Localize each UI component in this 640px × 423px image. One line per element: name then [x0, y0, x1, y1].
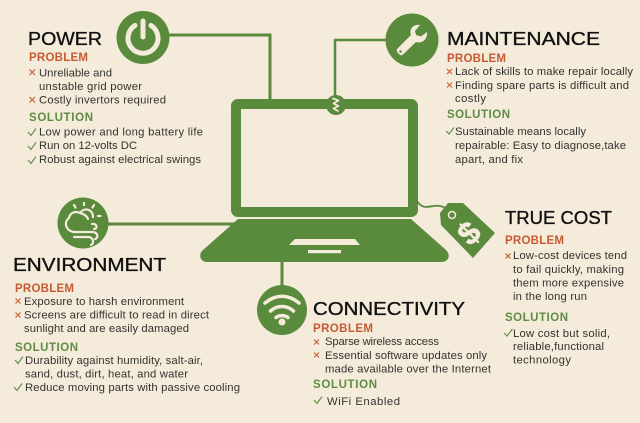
- icon: power: [116, 11, 170, 64]
- panel: true cost: [504, 207, 627, 366]
- panel: true cost: reliable,functional: [513, 341, 604, 353]
- clasp: [326, 95, 346, 115]
- panel: true cost: Low cost but solid,: [513, 328, 610, 340]
- panel: connectivity: WiFi Enabled: [327, 396, 400, 408]
- panel: true cost: PROBLEM: [505, 235, 564, 247]
- panel: power: Unreliable and: [39, 68, 112, 80]
- panel: maintenance: Sustainable means locally: [455, 126, 586, 138]
- panel: environment: Screens are difficult to read in direct: [24, 310, 210, 322]
- panel: power: Robust against electrical swings: [39, 154, 201, 166]
- laptop base: [200, 219, 449, 262]
- icon: environment: [58, 198, 108, 248]
- panel: power: [28, 28, 203, 166]
- heading: maintenance: MAINTENANCE: [447, 28, 600, 49]
- panel: true cost: SOLUTION: [505, 312, 568, 324]
- panel: connectivity: [313, 298, 492, 408]
- panel: power: Costly invertors required: [39, 94, 166, 106]
- panel: environment: Durability against humidity, salt-air,: [25, 355, 203, 367]
- panel: environment: sunlight and are easily damaged: [24, 323, 189, 335]
- connector lines: [105, 35, 451, 290]
- panel: maintenance: SOLUTION: [447, 109, 510, 121]
- panel: maintenance: Lack of skills to make repair locally: [455, 66, 633, 78]
- panel: connectivity: Essential software updates only: [325, 350, 487, 362]
- icon: price tag: $: [450, 214, 488, 252]
- panel: maintenance: PROBLEM: [447, 53, 506, 65]
- panel: connectivity: made available over the Internet: [325, 364, 492, 376]
- laptop screen: [231, 99, 418, 217]
- laptop: [200, 95, 449, 262]
- panel: maintenance: repairable: Easy to diagnose,take: [455, 140, 626, 152]
- panel: true cost: Low-cost devices tend: [513, 250, 627, 262]
- panel: connectivity: Sparse wireless access: [325, 336, 439, 348]
- panel: true cost: to fail quickly, making: [513, 264, 624, 276]
- panel: environment: Reduce moving parts with passive cooling: [25, 382, 240, 394]
- panel: environment: SOLUTION: [15, 342, 78, 354]
- panel: environment: [13, 254, 240, 394]
- heading: true cost: TRUE COST: [505, 207, 612, 228]
- panel: true cost: in the long run: [513, 291, 587, 303]
- panel: maintenance: apart, and fix: [455, 154, 523, 166]
- panel: environment: Exposure to harsh environment: [24, 296, 185, 308]
- panel: power: Low power and long battery life: [39, 126, 203, 138]
- panel: connectivity: SOLUTION: [313, 379, 377, 391]
- panel: power: SOLUTION: [29, 112, 93, 124]
- trackpad: [289, 239, 360, 245]
- panel: power: unstable grid power: [39, 81, 142, 93]
- panel: maintenance: [446, 28, 633, 166]
- heading: power: POWER: [28, 28, 102, 49]
- panel: connectivity: PROBLEM: [313, 323, 373, 335]
- front notch: [308, 250, 341, 253]
- panel: maintenance: Finding spare parts is difficult and: [455, 80, 629, 92]
- panel: power: PROBLEM: [29, 52, 88, 64]
- icon: wrench: [386, 14, 438, 66]
- icon: wifi: [257, 285, 307, 335]
- panel: environment: PROBLEM: [15, 283, 74, 295]
- panel: maintenance: costly: [455, 93, 486, 105]
- heading: environment: ENVIRONMENT: [13, 254, 166, 275]
- icon: price tag: [440, 203, 495, 258]
- panel: true cost: them more expensive: [513, 278, 624, 290]
- heading: connectivity: CONNECTIVITY: [313, 298, 465, 319]
- panel: true cost: technology: [513, 354, 571, 366]
- panel: environment: sand, dust, dirt, heat, and water: [25, 368, 188, 380]
- panel: power: Run on 12-volts DC: [39, 140, 137, 152]
